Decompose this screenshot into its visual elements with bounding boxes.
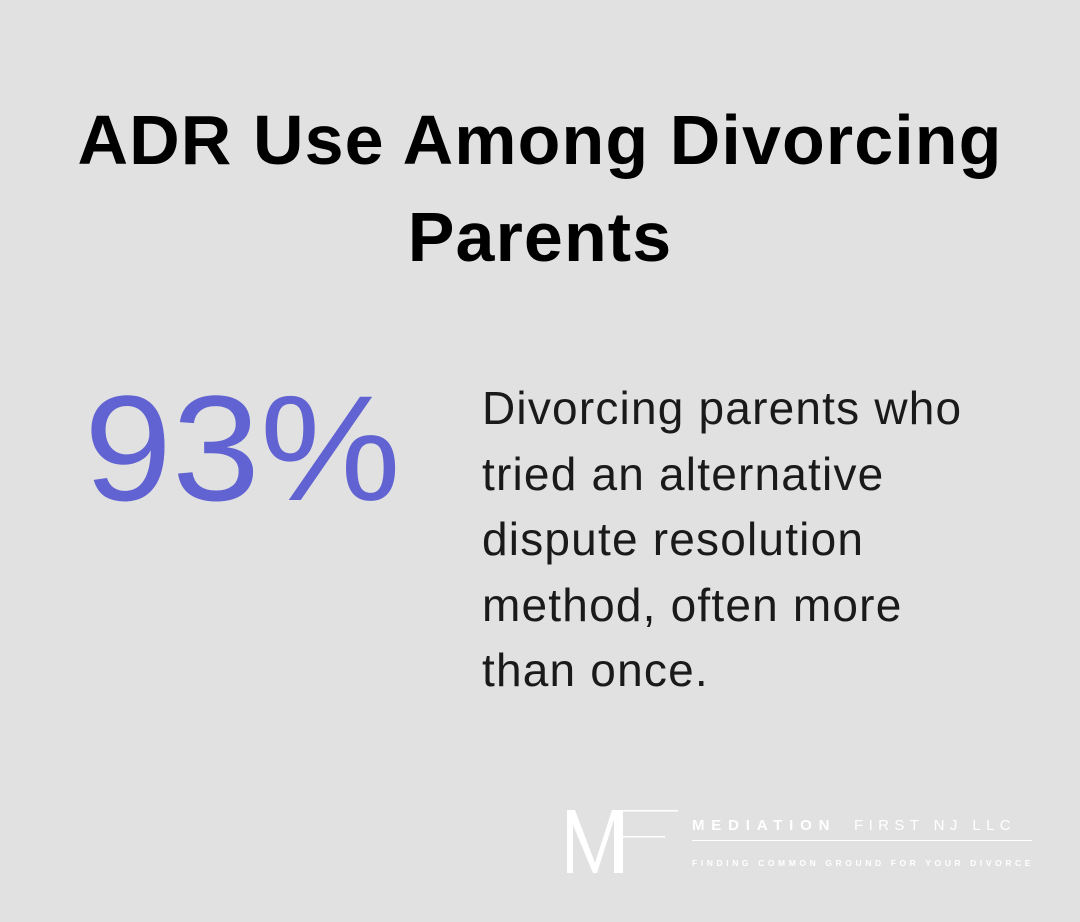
description text: tried an alternative — [482, 448, 884, 500]
big stat number: 93% — [84, 364, 401, 532]
logo: Mediation First NJ LLC: FIRST NJ LLC — [854, 817, 1016, 834]
title — [77, 101, 1002, 276]
description text: Divorcing parents who — [482, 382, 962, 434]
description text: method, often more — [482, 578, 902, 630]
logo: Mediation First NJ LLC — [567, 810, 1034, 873]
title: ADR Use Among Divorcing — [77, 101, 1002, 179]
description text: dispute resolution — [482, 513, 864, 565]
logo: Mediation First NJ LLC: FINDING COMMON GROUND FOR YOUR DIVORCE — [692, 858, 1034, 868]
description text — [482, 382, 962, 696]
description text: than once. — [482, 644, 709, 696]
logo: Mediation First NJ LLC: MEDIATION — [692, 817, 836, 834]
title: Parents — [408, 198, 672, 276]
